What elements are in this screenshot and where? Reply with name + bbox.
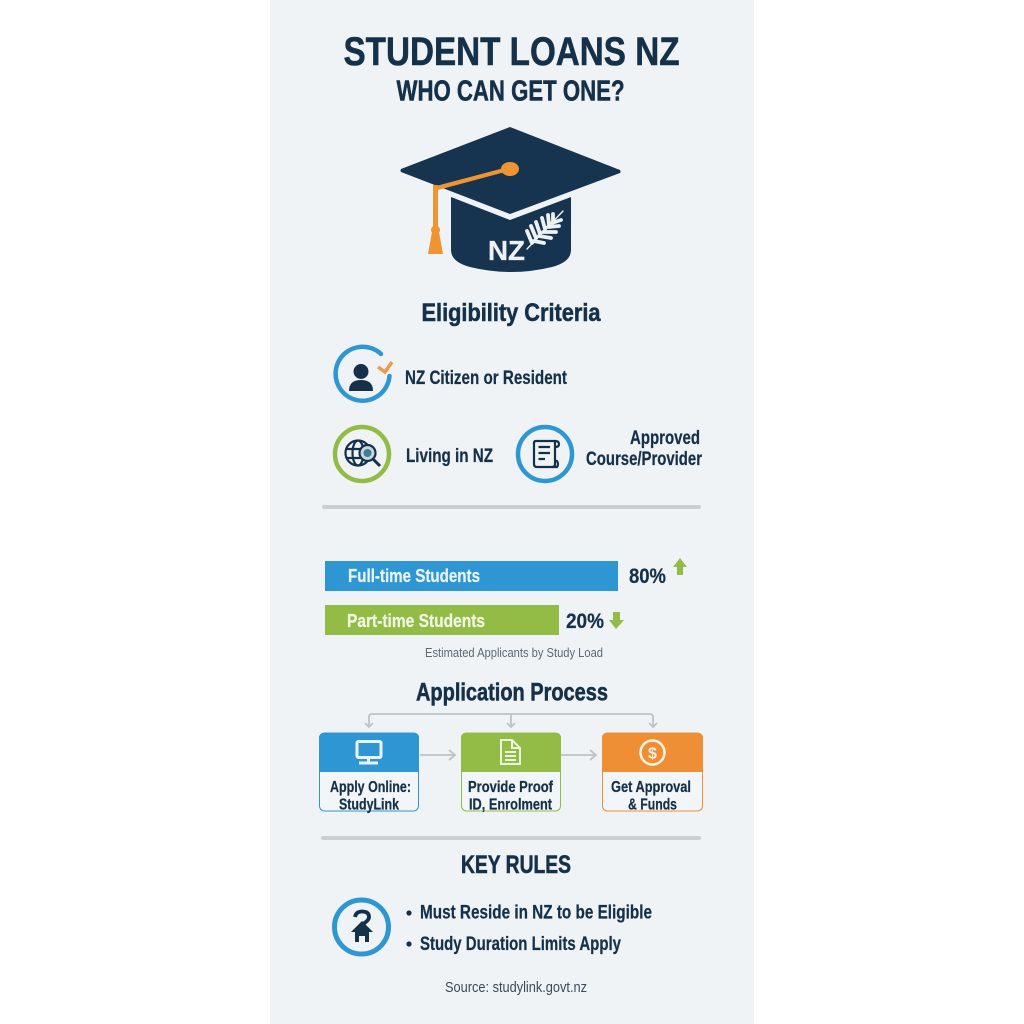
title: STUDENT LOANS NZ	[344, 30, 680, 74]
value: 80% up: 80%	[629, 564, 666, 588]
icon: globe with magnifier	[335, 427, 389, 481]
heading: eligibility criteria: Eligibility Criteria	[422, 299, 601, 327]
icon: dollar coin: $	[648, 746, 657, 762]
bar chart: study load	[325, 558, 687, 660]
step label: Provide Proof	[468, 779, 554, 796]
label: Course/Provider	[586, 448, 702, 470]
step 1: apply online	[319, 733, 419, 814]
step label	[468, 779, 554, 814]
heading: key rules: KEY RULES	[461, 851, 571, 879]
icon: fern leaf	[527, 211, 563, 249]
chart caption: Estimated Applicants by Study Load	[425, 645, 603, 660]
label: NZ Citizen or Resident	[405, 367, 567, 389]
value: 80% up	[629, 558, 687, 588]
label: Approved	[630, 427, 700, 449]
step label: & Funds	[628, 796, 677, 814]
label: Living in NZ	[406, 445, 493, 467]
step label: ID, Enrolment	[469, 796, 553, 814]
step 3: get approval	[602, 733, 703, 814]
criterion: citizen or resident	[336, 347, 567, 401]
step label	[611, 779, 691, 814]
step label: StudyLink	[339, 796, 399, 814]
subtitle: WHO CAN GET ONE?	[396, 76, 624, 108]
step label: Get Approval	[611, 779, 691, 796]
icon: scroll document	[518, 427, 572, 481]
bar: part-time: Part-time Students	[347, 610, 485, 631]
rule 2: Study Duration Limits Apply	[420, 933, 621, 955]
panel: background column	[270, 0, 754, 1024]
criterion: approved course/provider	[518, 427, 702, 481]
icon: person with check	[336, 347, 392, 401]
bar: full-time	[325, 561, 618, 591]
arrow: step 1 to 2	[420, 750, 455, 760]
criterion: living in NZ	[335, 427, 493, 481]
icon: graduation cap	[400, 127, 620, 272]
cap label: NZ	[488, 235, 525, 266]
step label: Apply Online:	[330, 779, 411, 796]
key rules list	[406, 902, 652, 955]
icon: house with question mark	[334, 900, 388, 954]
heading: application process: Application Process	[416, 678, 608, 706]
arrow: step 2 to 3	[561, 750, 596, 760]
icon: document	[501, 740, 520, 764]
bar: part-time	[325, 605, 559, 635]
icon: monitor	[357, 742, 381, 763]
source: Source: studylink.govt.nz	[445, 979, 587, 996]
value: 20% down: 20%	[566, 609, 604, 633]
rule 1: Must Reside in NZ to be Eligible	[420, 902, 652, 924]
label	[586, 427, 702, 470]
arrows: top connector	[365, 714, 657, 727]
step 2: provide proof	[461, 733, 561, 814]
step label	[330, 779, 411, 814]
bar: full-time: Full-time Students	[348, 565, 480, 586]
